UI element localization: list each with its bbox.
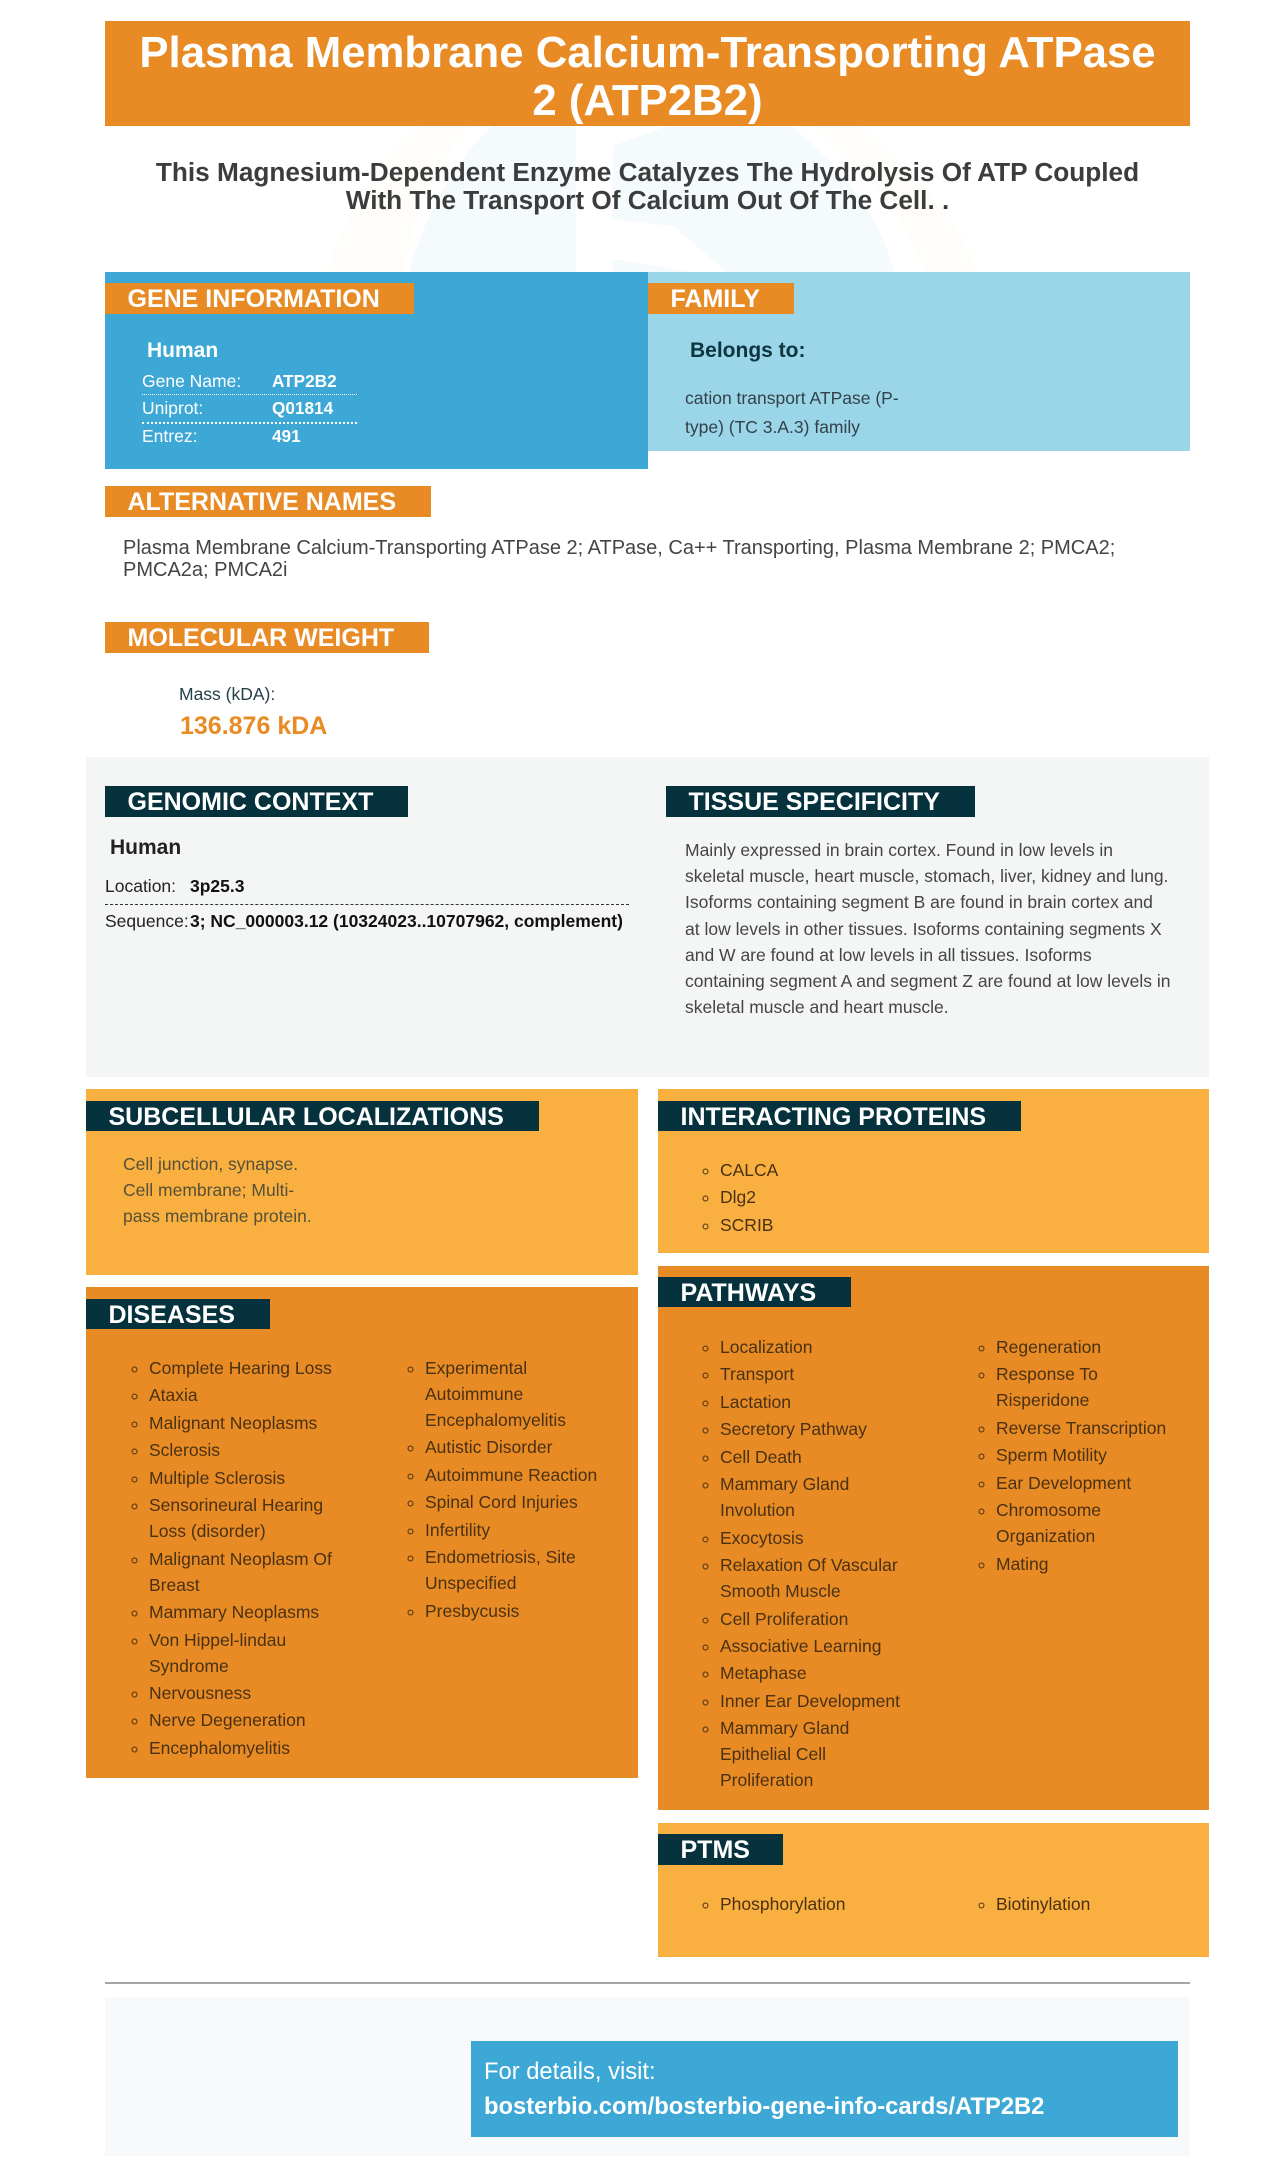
mass value: 136.876 kDA: [180, 712, 327, 740]
disease list column 1: Syndrome: [149, 1656, 229, 1676]
panel: pathways: [658, 1266, 1209, 1810]
subtitle: With The Transport Of Calcium Out Of The Cell. .: [346, 184, 949, 214]
uniprot row: Uniprot:: [142, 398, 203, 418]
panel: subcellular localizations: [86, 1089, 638, 1275]
uniprot row: [142, 398, 357, 424]
heading: molecular weight: MOLECULAR WEIGHT: [128, 624, 394, 652]
pathway list column 1: Secretory Pathway: [720, 1419, 867, 1439]
callout: details link: bosterbio.com/bosterbio-gene-info-cards/ATP2B2: [484, 2093, 1044, 2120]
title banner: Plasma Membrane Calcium-Transporting ATPase: [139, 28, 1156, 77]
heading: ptms: [658, 1834, 783, 1865]
disease list column 1: Encephalomyelitis: [149, 1738, 290, 1758]
sequence row: Sequence:: [105, 911, 189, 931]
tissue specificity text: Isoforms containing segment B are found in brain cortex and: [685, 892, 1153, 912]
pathway list column 2: Risperidone: [996, 1390, 1089, 1410]
protein list: CALCA: [720, 1160, 778, 1180]
disease list column 1: Nerve Degeneration: [149, 1710, 306, 1730]
title banner: [105, 21, 1190, 126]
panel: footer: [105, 1997, 1190, 2156]
disease list column 2: Spinal Cord Injuries: [425, 1492, 578, 1512]
disease list column 1: [132, 1358, 332, 1758]
species label: Human: [110, 836, 181, 859]
pathway list column 1: Cell Proliferation: [720, 1608, 848, 1628]
entrez row: 491: [272, 426, 301, 446]
pathway list column 1: Epithelial Cell: [720, 1744, 826, 1764]
pathway list column 2: Response To: [996, 1364, 1098, 1384]
disease list column 2: Experimental: [425, 1358, 527, 1378]
pathway list column 2: Organization: [996, 1526, 1095, 1546]
background watermark logo: [409, 126, 894, 272]
panel: diseases: [86, 1287, 638, 1778]
family text: type) (TC 3.A.3) family: [685, 417, 860, 437]
pathway list column 2: Chromosome: [996, 1500, 1101, 1520]
pathway list column 1: Localization: [720, 1337, 812, 1357]
pathway list column 1: Relaxation Of Vascular: [720, 1555, 898, 1575]
subtitle: [156, 157, 1139, 214]
callout: details link: [471, 2041, 1178, 2137]
panel: family: [648, 272, 1190, 451]
pathway list column 1: Exocytosis: [720, 1528, 804, 1548]
disease list column 1: Sensorineural Hearing: [149, 1495, 323, 1515]
disease list column 1: Multiple Sclerosis: [149, 1468, 285, 1488]
heading: gene information: GENE INFORMATION: [128, 285, 380, 313]
protein list: SCRIB: [720, 1215, 773, 1235]
callout: details link: For details, visit:: [484, 2058, 656, 2085]
gene name row: [142, 371, 357, 395]
subtitle: This Magnesium-Dependent Enzyme Catalyzes The Hydrolysis Of ATP Coupled: [156, 157, 1139, 187]
pathway list column 2: Ear Development: [996, 1473, 1131, 1493]
alternative names text: PMCA2a; PMCA2i: [123, 559, 288, 581]
pathway list column 2: Mating: [996, 1554, 1049, 1574]
heading: pathways: PATHWAYS: [680, 1279, 816, 1307]
panel: interacting proteins: [658, 1089, 1209, 1253]
pathway list column 1: [702, 1337, 900, 1790]
tissue specificity text: skeletal muscle and heart muscle.: [685, 997, 949, 1017]
disease list column 1: Mammary Neoplasms: [149, 1602, 319, 1622]
ptm list column 1: Phosphorylation: [720, 1894, 846, 1914]
uniprot row: Q01814: [272, 398, 333, 418]
heading: pathways: [658, 1277, 851, 1307]
protein list: [702, 1160, 778, 1235]
pathway list column 1: Inner Ear Development: [720, 1691, 900, 1711]
heading: ptms: PTMS: [680, 1836, 750, 1864]
disease list column 1: Loss (disorder): [149, 1521, 266, 1541]
sequence row: 3; NC_000003.12 (10324023..10707962, complement): [190, 911, 623, 931]
localization text: Cell junction, synapse.: [123, 1154, 298, 1174]
pathway list column 1: Cell Death: [720, 1447, 802, 1467]
disease list column 1: Malignant Neoplasms: [149, 1413, 317, 1433]
disease list column 1: Malignant Neoplasm Of: [149, 1549, 332, 1569]
family text: cation transport ATPase (P-: [685, 388, 899, 408]
title banner: 2 (ATP2B2): [532, 76, 763, 125]
pathway list column 2: Regeneration: [996, 1337, 1101, 1357]
disease list column 2: Infertility: [425, 1520, 490, 1540]
heading: subcellular localizations: SUBCELLULAR LOCALIZATIONS: [108, 1103, 504, 1131]
ptm list column 2: Biotinylation: [996, 1894, 1090, 1914]
gene name row: Gene Name:: [142, 371, 241, 391]
disease list column 2: Autoimmune Reaction: [425, 1465, 597, 1485]
pathway list column 1: Metaphase: [720, 1663, 807, 1683]
disease list column 2: Unspecified: [425, 1573, 516, 1593]
disease list column 2: Presbycusis: [425, 1601, 519, 1621]
protein list: Dlg2: [720, 1187, 756, 1207]
tissue specificity text: [685, 840, 1170, 1017]
disease list column 1: Sclerosis: [149, 1440, 220, 1460]
pathway list column 1: Involution: [720, 1500, 795, 1520]
localization text: pass membrane protein.: [123, 1206, 312, 1226]
heading: diseases: DISEASES: [108, 1301, 235, 1329]
tissue specificity text: containing segment A and segment Z are found at low levels in: [685, 971, 1170, 991]
panel: genomic context and tissue specificity: [86, 757, 1209, 1077]
panel: gene information: [105, 272, 648, 469]
localization text: Cell membrane; Multi-: [123, 1180, 294, 1200]
pathway list column 2: Sperm Motility: [996, 1445, 1107, 1465]
localization text: [123, 1154, 312, 1226]
family text: [685, 388, 899, 437]
tissue specificity text: Mainly expressed in brain cortex. Found in low levels in: [685, 840, 1113, 860]
tissue specificity text: at low levels in other tissues. Isoforms containing segments X: [685, 919, 1162, 939]
entrez row: Entrez:: [142, 426, 197, 446]
heading: diseases: [86, 1299, 270, 1329]
heading: tissue specificity: TISSUE SPECIFICITY: [688, 788, 940, 816]
mass label: Mass (kDA):: [179, 684, 275, 704]
disease list column 2: Encephalomyelitis: [425, 1410, 566, 1430]
species label: Human: [147, 339, 218, 362]
pathway list column 1: Mammary Gland: [720, 1718, 849, 1738]
gene name row: ATP2B2: [272, 371, 337, 391]
alternative names text: Plasma Membrane Calcium-Transporting ATPase 2; ATPase, Ca++ Transporting, Plasma Membrane 2; PMCA2;: [123, 537, 1115, 559]
belongs to label: Belongs to:: [690, 339, 806, 362]
pathway list column 1: Transport: [720, 1364, 794, 1384]
location row: [105, 876, 629, 905]
heading: interacting proteins: INTERACTING PROTEINS: [680, 1103, 986, 1131]
panel: ptms: [658, 1823, 1209, 1957]
tissue specificity text: and W are found at low levels in all tissues. Isoforms: [685, 945, 1092, 965]
disease list column 1: Nervousness: [149, 1683, 251, 1703]
location row: 3p25.3: [190, 876, 244, 896]
disease list column 2: Endometriosis, Site: [425, 1547, 576, 1567]
pathway list column 2: [978, 1337, 1166, 1574]
tissue specificity text: skeletal muscle, heart muscle, stomach, liver, kidney and lung.: [685, 866, 1168, 886]
alternative names text: [123, 537, 1115, 581]
disease list column 1: Ataxia: [149, 1385, 198, 1405]
pathway list column 1: Mammary Gland: [720, 1474, 849, 1494]
disease list column 1: Von Hippel-lindau: [149, 1630, 286, 1650]
disease list column 2: [408, 1358, 597, 1621]
pathway list column 1: Proliferation: [720, 1770, 813, 1790]
heading: family: FAMILY: [670, 285, 760, 313]
disease list column 2: Autistic Disorder: [425, 1437, 552, 1457]
pathway list column 1: Lactation: [720, 1392, 791, 1412]
heading: alternative names: ALTERNATIVE NAMES: [128, 488, 396, 516]
heading: genomic context: GENOMIC CONTEXT: [128, 788, 373, 816]
pathway list column 2: Reverse Transcription: [996, 1418, 1166, 1438]
disease list column 1: Breast: [149, 1575, 200, 1595]
heading: family: [648, 283, 794, 314]
pathway list column 1: Smooth Muscle: [720, 1581, 841, 1601]
disease list column 1: Complete Hearing Loss: [149, 1358, 332, 1378]
location row: Location:: [105, 876, 176, 896]
pathway list column 1: Associative Learning: [720, 1636, 881, 1656]
entrez row: [142, 426, 301, 446]
disease list column 2: Autoimmune: [425, 1384, 523, 1404]
